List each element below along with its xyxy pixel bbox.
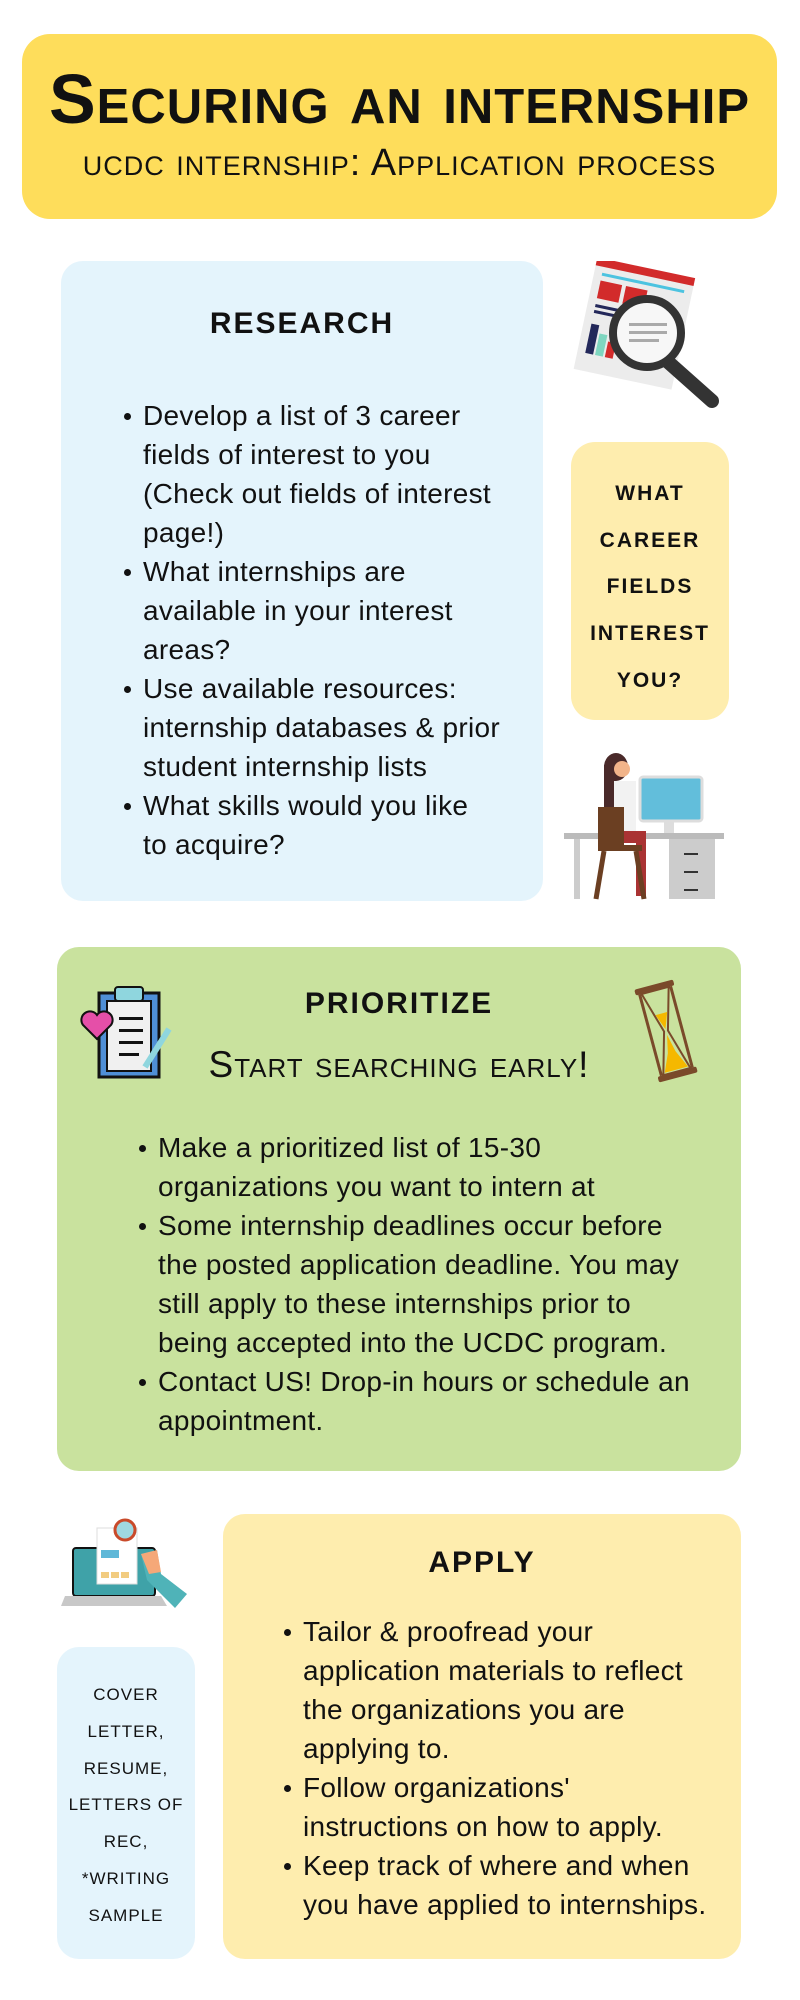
apply bullets: applying to. xyxy=(303,1733,450,1764)
research bullets: page!) xyxy=(143,517,224,548)
prioritize bullets xyxy=(139,1132,690,1436)
callout: application materials: REC, xyxy=(104,1832,148,1851)
callout: application materials: *WRITING xyxy=(82,1869,170,1888)
heading: apply: APPLY xyxy=(428,1546,536,1579)
prioritize bullets: Contact US! Drop-in hours or schedule an xyxy=(158,1366,690,1397)
research bullets xyxy=(124,400,500,860)
header banner xyxy=(22,34,777,219)
apply bullets xyxy=(284,1616,706,1920)
callout: application materials: LETTER, xyxy=(88,1722,164,1741)
research bullets: student internship lists xyxy=(143,751,427,782)
callout: what career fields: YOU? xyxy=(617,669,683,692)
callout: application materials: RESUME, xyxy=(84,1759,168,1778)
heading: prioritize: PRIORITIZE xyxy=(305,987,493,1020)
research bullets: to acquire? xyxy=(143,829,285,860)
subtitle: ucdc internship: Application process xyxy=(83,142,716,184)
research bullets: internship databases & prior xyxy=(143,712,500,743)
callout: what career fields: CAREER xyxy=(600,529,700,552)
apply bullets: Follow organizations' xyxy=(303,1772,570,1803)
callout: application materials: COVER xyxy=(93,1685,159,1704)
apply bullets: instructions on how to apply. xyxy=(303,1811,663,1842)
panel: prioritize xyxy=(57,947,741,1471)
subheading: start searching early: Start searching early! xyxy=(209,1044,589,1085)
research bullets: areas? xyxy=(143,634,230,665)
research bullets: Use available resources: xyxy=(143,673,457,704)
callout: what career fields: WHAT xyxy=(615,482,685,505)
research bullets: What skills would you like xyxy=(143,790,468,821)
callout: what career fields: FIELDS xyxy=(607,575,693,598)
research bullets: fields of interest to you xyxy=(143,439,431,470)
callout: what career fields: INTEREST xyxy=(590,622,710,645)
icon: clipboard with heart xyxy=(80,986,172,1078)
panel: research xyxy=(61,261,543,901)
research bullets: Develop a list of 3 career xyxy=(143,400,461,431)
panel: apply xyxy=(223,1514,741,1959)
research bullets: What internships are xyxy=(143,556,406,587)
callout: application materials: LETTERS OF xyxy=(69,1795,183,1814)
prioritize bullets: Make a prioritized list of 15-30 xyxy=(158,1132,541,1163)
callout: application materials xyxy=(57,1647,195,1959)
prioritize bullets: appointment. xyxy=(158,1405,324,1436)
prioritize bullets: organizations you want to intern at xyxy=(158,1171,595,1202)
apply bullets: Tailor & proofread your xyxy=(303,1616,593,1647)
prioritize bullets: the posted application deadline. You may xyxy=(158,1249,679,1280)
prioritize bullets: being accepted into the UCDC program. xyxy=(158,1327,667,1358)
heading: research: RESEARCH xyxy=(210,307,394,340)
apply bullets: you have applied to internships. xyxy=(303,1889,706,1920)
research bullets: available in your interest xyxy=(143,595,453,626)
prioritize bullets: still apply to these internships prior to xyxy=(158,1288,631,1319)
icon: woman at desk xyxy=(564,753,724,900)
research bullets: (Check out fields of interest xyxy=(143,478,491,509)
apply bullets: the organizations you are xyxy=(303,1694,625,1725)
apply bullets: Keep track of where and when xyxy=(303,1850,690,1881)
icon: hourglass xyxy=(634,980,698,1082)
callout: what career fields xyxy=(571,442,729,720)
prioritize bullets: Some internship deadlines occur before xyxy=(158,1210,663,1241)
apply bullets: application materials to reflect xyxy=(303,1655,683,1686)
title: Securing an internship xyxy=(49,60,750,138)
icon: newspaper with magnifier xyxy=(574,261,719,408)
icon: laptop with resume xyxy=(61,1518,187,1608)
callout: application materials: SAMPLE xyxy=(88,1906,163,1925)
